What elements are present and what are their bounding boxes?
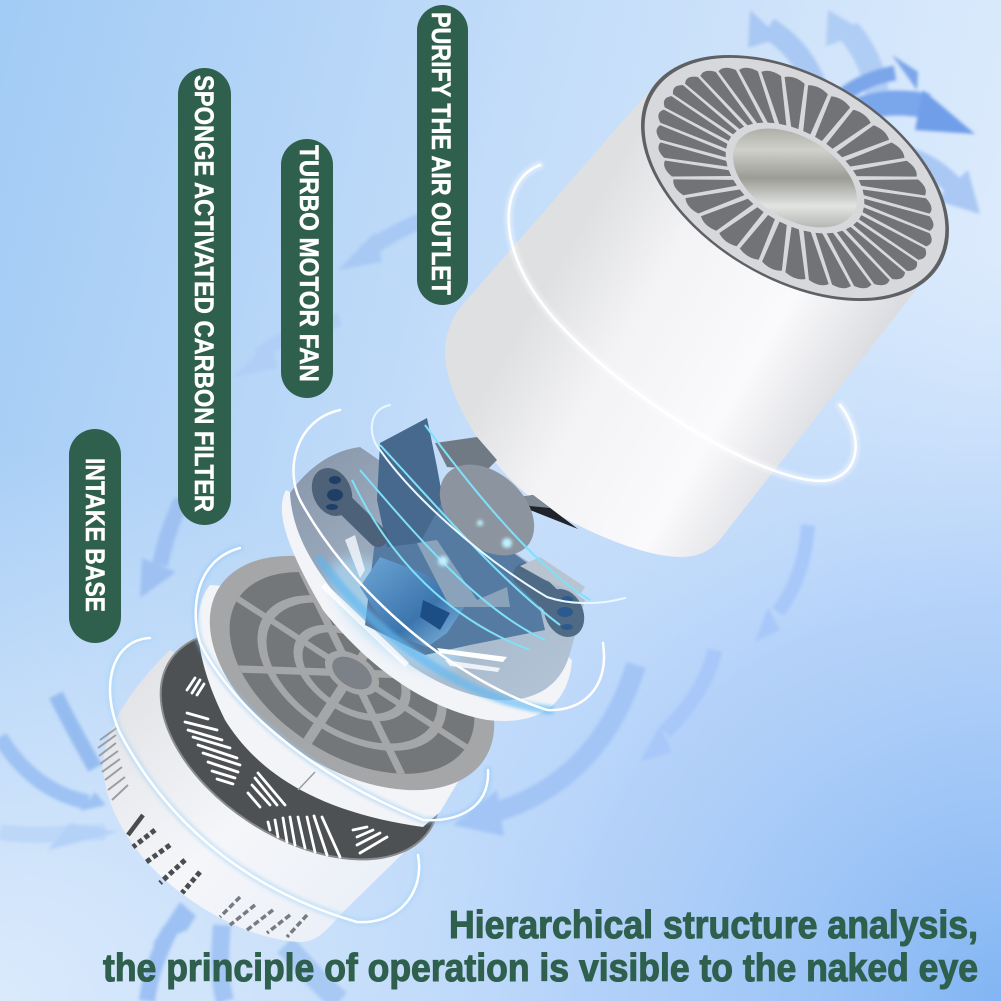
fan inner glow — [312, 538, 478, 692]
label: sponge activated carbon filter — [178, 68, 231, 525]
fan white rim — [282, 490, 572, 721]
label: purify the air outlet: PURIFY THE AIR OUTLET — [426, 12, 456, 295]
swirl: top cylinder — [509, 165, 856, 481]
label: intake base — [69, 429, 121, 643]
fan blades — [345, 418, 578, 672]
arrows: intake airflow bottom left — [0, 695, 340, 1001]
fan arm left — [304, 461, 378, 537]
top cylinder: purify air outlet — [445, 6, 990, 557]
base body — [103, 650, 432, 942]
fan glow dots — [438, 520, 512, 566]
arrows: side airflow — [140, 218, 808, 836]
fan hub — [422, 446, 552, 574]
filter grid — [168, 507, 536, 839]
cyan light streaks — [352, 425, 590, 650]
label: turbo motor fan — [281, 139, 333, 398]
outlet grille — [600, 6, 990, 350]
arrows: outlet airflow top right — [748, 10, 980, 214]
filter band seam — [298, 772, 315, 790]
base perforations — [98, 727, 307, 937]
fan arm right — [520, 557, 592, 644]
label: sponge activated carbon filter: SPONGE ACTIVATED CARBON FILTER — [189, 75, 219, 512]
filter white band — [198, 585, 480, 827]
carbon filter — [168, 507, 536, 839]
caption — [103, 904, 978, 990]
label: purify the air outlet — [417, 5, 468, 305]
fan bowl — [290, 447, 585, 700]
swirl: fan — [293, 405, 625, 710]
label: intake base: INTAKE BASE — [80, 458, 110, 612]
cylinder body — [445, 90, 938, 557]
turbo motor fan — [282, 418, 592, 721]
intake base — [98, 583, 480, 942]
swirl: base — [110, 638, 419, 922]
base dark ring — [120, 583, 480, 907]
label: turbo motor fan: TURBO MOTOR FAN — [294, 145, 324, 382]
swirl rings — [110, 165, 856, 922]
swirl: filter — [196, 548, 488, 820]
base slot stripes — [185, 678, 387, 857]
fan rim highlight bar — [323, 585, 407, 665]
